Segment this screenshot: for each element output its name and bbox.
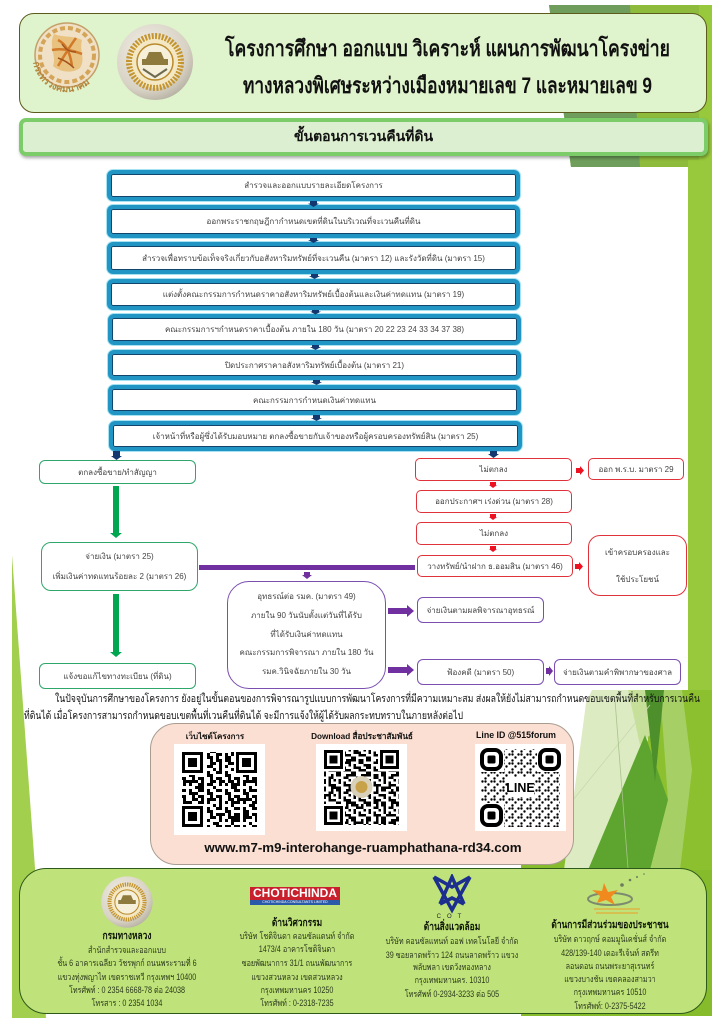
contact: engineering: 1473/4 อาคารโชติจินดา [259, 944, 335, 954]
red arrows [489, 466, 584, 571]
step 3: สำรวจเพื่อทราบข้อเท็จจริงเกี่ยวกับอสังหาริมทรัพย์ที่จะเวนคืน (มาตรา 12) และรังวัดที่ดิน (มาตรา 15) [142, 254, 485, 262]
panel: links and qr codes [150, 723, 574, 865]
qr code: download [316, 744, 407, 831]
step 7 [108, 385, 521, 415]
contact: public participation: กรุงเทพมหานคร 10510 [574, 987, 646, 997]
contact: department of highways: โทรสาร : 0 2354 1034 [92, 998, 162, 1008]
contact: public participation: 428/139-140 เดอะรีเจ้นท์ สตรีท [561, 948, 659, 958]
contact: engineering [240, 916, 354, 1008]
box: urgent notice: ออกประกาศฯ เร่งด่วน (มาตรา 28) [435, 497, 553, 506]
box: land registration [39, 663, 196, 689]
logo: public participation star [587, 873, 645, 914]
box: deposit: วางทรัพย์/นำฝาก ธ.ออมสิน (มาตรา 46) [427, 562, 563, 570]
logo: cot [432, 874, 472, 920]
box: possession [588, 535, 687, 596]
qr code: line: LINE [506, 781, 535, 795]
contact: department of highways [57, 930, 197, 1008]
box: payment: เพิ่มเงินค่าทดแทนร้อยละ 2 (มาตรา 26) [53, 572, 186, 580]
box: pay by court: จ่ายเงินตามคำพิพากษาของศาล [563, 668, 672, 676]
contact: department of highways: โทรศัพท์ : 0 2354 6668-78 ต่อ 24038 [69, 985, 185, 995]
contact: department of highways: สำนักสำรวจและออกแบบ [88, 945, 166, 955]
box: disagree [415, 458, 572, 481]
step 6 [108, 350, 521, 380]
contact: public participation: แขวงบางชัน เขตคลองสามวา [564, 974, 656, 984]
box: disagree again: ไม่ตกลง [480, 529, 508, 538]
step 7: คณะกรรมการกำหนดเงินค่าทดแทน [253, 396, 376, 404]
contact: public participation: โทรศัพท์: 0-2375-5422 [574, 1001, 646, 1011]
contact: engineering: ซอยพัฒนาการ 31/1 ถนนพัฒนาการ [242, 958, 352, 968]
box: royal act: ออก พ.ร.บ. มาตรา 29 [598, 464, 674, 474]
step 2 [107, 205, 520, 238]
contact: public participation [551, 918, 669, 1011]
logo: cot: COT [437, 914, 467, 920]
contact: engineering: กรุงเทพมหานคร 10250 [261, 985, 333, 995]
label: website: เว็บไซต์โครงการ [186, 732, 244, 741]
logo: chotichinda: CHOTICHINDA CONSULTANTS LIMITED [262, 900, 328, 904]
logo: ministry of transport seal [33, 22, 100, 92]
contact: engineering: ด้านวิศวกรรม [272, 917, 322, 929]
step 5: คณะกรรมการฯกำหนดราคาเบื้องต้น ภายใน 180 วัน (มาตรา 20 22 23 24 33 34 37 38) [165, 325, 464, 334]
contact: public participation: บริษัท ดาวฤกษ์ คอมมูนิเคชั่นส์ จำกัด [554, 934, 666, 944]
navy step arrows [111, 201, 499, 460]
contact: environment: พลับพลา เขตวังทองหลาง [413, 962, 491, 972]
box: urgent notice [416, 490, 572, 513]
step 6: ปิดประกาศราคาอสังหาริมทรัพย์เบื้องต้น (มาตรา 21) [225, 360, 404, 370]
box: possession: ใช้ประโยชน์ [616, 574, 659, 584]
logo: department of highways seal [117, 24, 193, 100]
box: pay by appeal: จ่ายเงินตามผลพิจารณาอุทธรณ์ [427, 606, 534, 614]
box: pay by appeal [417, 597, 544, 623]
box: disagree again [416, 522, 572, 545]
label: download: Download สื่อประชาสัมพันธ์ [311, 732, 413, 741]
box: pay by court [554, 659, 681, 685]
paragraph [24, 691, 700, 722]
qr code: website [174, 744, 265, 835]
label: line id: Line ID @515forum [476, 730, 556, 740]
website url: www.m7-m9-interohange-ruamphathana-rd34.com [204, 840, 522, 855]
contact: environment: ด้านสิ่งแวดล้อม [424, 921, 480, 933]
logo: chotichinda [250, 887, 340, 905]
box: lawsuit: ฟ้องคดี (มาตรา 50) [447, 668, 514, 676]
contact: engineering: แขวงสวนหลวง เขตสวนหลวง [251, 972, 343, 982]
title [224, 35, 670, 98]
box: appeal: คณะกรรมการพิจารณา ภายใน 180 วัน [240, 648, 373, 657]
contact: department of highways: แขวงทุ่งพญาไท เขตราชเทวี กรุงเทพฯ 10400 [58, 972, 196, 982]
box: disagree: ไม่ตกลง [479, 465, 508, 474]
contact: environment: 39 ซอยลาดพร้าว 124 ถนนลาดพร้าว แขวง [386, 950, 518, 960]
box: agreement: ตกลงซื้อขาย/ทำสัญญา [78, 468, 157, 476]
green arrows [110, 486, 122, 657]
contact: environment [386, 918, 518, 999]
contact: public participation: ด้านการมีส่วนร่วมของประชาชน [551, 919, 669, 931]
box: appeal: ภายใน 90 วันนับตั้งแต่วันที่ได้รับ [251, 611, 362, 620]
contact: environment: โทรศัพท์ 0-2934-3233 ต่อ 505 [405, 989, 499, 999]
contact: environment: บริษัท คอนซัลแทนท์ ออฟ เทคโนโลยี จำกัด [386, 936, 518, 946]
box: deposit [417, 555, 573, 577]
purple connectors [199, 565, 553, 676]
box: appeal: ที่ได้รับเงินค่าทดแทน [270, 630, 343, 639]
header panel [19, 13, 707, 113]
contact: department of highways: ชั้น 6 อาคารเฉลียว วัชรพุกก์ ถนนพระรามที่ 6 [57, 958, 197, 968]
box: payment: จ่ายเงิน (มาตรา 25) [85, 552, 154, 560]
contact: environment: กรุงเทพมหานคร. 10310 [415, 975, 489, 985]
qr code: line [475, 744, 566, 831]
box: royal act [588, 458, 684, 480]
step 4 [107, 279, 520, 310]
box: appeal: อุทธรณ์ต่อ รมค. (มาตรา 49) [257, 592, 356, 601]
step 5 [108, 314, 521, 345]
step 1 [107, 170, 520, 201]
step 8 [109, 421, 522, 451]
box: agreement [39, 460, 196, 484]
step 4: แต่งตั้งคณะกรรมการกำหนดราคาอสังหาริมทรัพย์เบื้องต้นและเงินค่าทดแทน (มาตรา 19) [163, 290, 464, 299]
box: lawsuit [417, 659, 544, 685]
box: appeal: รมค.วินิจฉัยภายใน 30 วัน [262, 667, 351, 676]
step 2: ออกพระราชกฤษฎีกากำหนดเขตที่ดินในบริเวณที่จะเวนคืนที่ดิน [207, 217, 420, 226]
section heading bar [19, 118, 708, 156]
box: appeal [227, 581, 386, 689]
box: land registration: แจ้งขอแก้ไขทางทะเบียน (ที่ดิน) [63, 672, 172, 680]
panel: footer contacts [19, 868, 707, 1014]
logo: department of highways footer seal [101, 876, 153, 928]
step 3 [107, 242, 520, 274]
contact: department of highways: กรมทางหลวง [102, 930, 152, 942]
step 1: สำรวจและออกแบบรายละเอียดโครงการ [244, 181, 383, 190]
box: possession: เข้าครอบครองและ [605, 548, 670, 556]
contact: engineering: โทรศัพท์ : 0-2318-7235 [260, 998, 334, 1008]
step 8: เจ้าหน้าที่หรือผู้ซึ่งได้รับมอบหมาย ตกลงซื้อขายกับเจ้าของหรือผู้ครอบครองทรัพย์สิน (มาตรา 25) [153, 432, 478, 440]
section heading bar: ขั้นตอนการเวนคืนที่ดิน [294, 128, 433, 144]
contact: public participation: ลอนดอน ถนนพระยาสุเรนทร์ [566, 961, 654, 971]
contact: engineering: บริษัท โชติจินดา คอนซัลแตนท์ จำกัด [240, 931, 354, 941]
paragraph: ที่ดินได้ เมื่อโครงการสามารถกำหนดขอบเขตพื้นที่เวนคืนที่ดินได้ จะมีการแจ้งให้ผู้ได้รับผลกระทบทราบในภายหลังต่อไป [24, 708, 463, 722]
box: payment [41, 542, 198, 591]
